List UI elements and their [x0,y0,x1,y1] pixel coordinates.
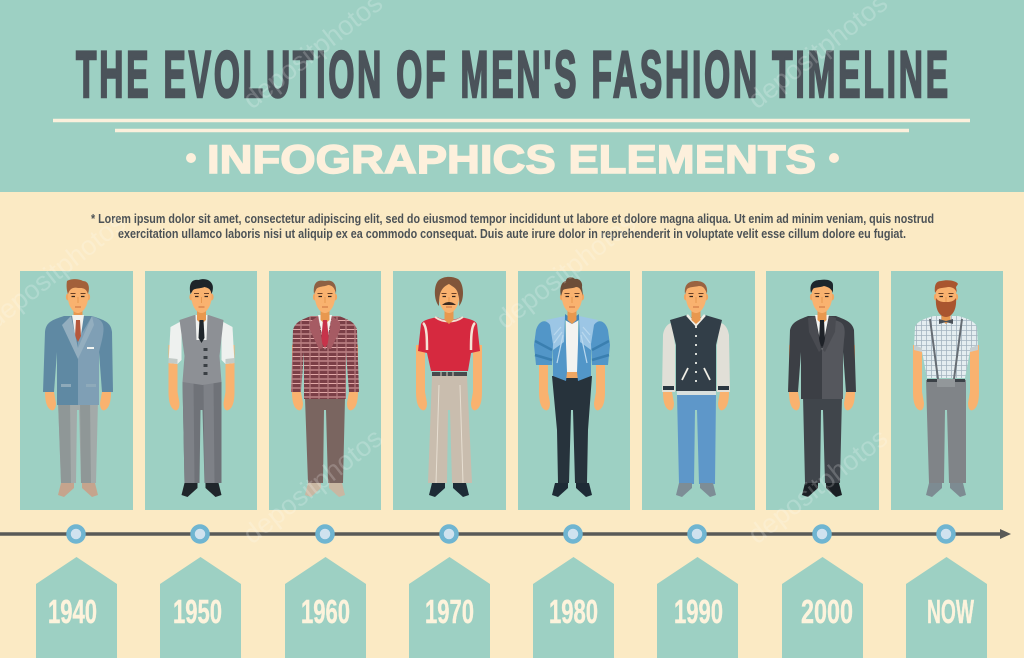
figure: 1990s varsity jacket [662,281,730,497]
watermarks [0,0,893,550]
year tag: now [906,557,987,658]
figure: 1940s suit [43,279,113,497]
title rules [53,120,970,130]
watermarks: depositphotos [490,208,641,335]
year tag: 1970 [409,557,490,658]
arrow head [1000,529,1011,539]
year tag: 1950 [160,557,241,658]
panel: 2000 [766,271,879,510]
panel: 1960 [269,271,381,510]
timeline nodes [68,526,954,542]
figure: 1970s flares [416,277,482,497]
watermarks: depositphotos [237,423,388,550]
title: THE EVOLUTION OF MEN'S FASHION TIMELINE [76,39,948,112]
panel: 1980 [518,271,630,510]
year tag: 1980 [533,557,614,658]
year tag: 1970: 1970 [425,593,474,630]
panel: 1970 [393,271,506,510]
figure: modern hipster [913,280,979,497]
year tag: 2000: 2000 [801,593,853,630]
timeline axis [0,532,1002,536]
subtitle: INFOGRAPHICS ELEMENTS [207,138,816,182]
year tag: 1950: 1950 [173,593,222,630]
figure: 1960s plaid jacket [291,281,359,497]
panel: 1990 [642,271,755,510]
year tag: 1940: 1940 [48,593,97,630]
figure: 1950s waistcoat [168,279,234,497]
year tag: 1960: 1960 [301,593,350,630]
panel: 1940 [20,271,133,510]
year tag: 1980: 1980 [549,593,598,630]
panel: now [891,271,1003,510]
figure: 1980s bomber jacket [534,277,610,497]
year tag: now: NOW [927,593,974,630]
header band [0,0,1024,192]
figure: 2000s dark suit [788,280,856,497]
year tag: 1960 [285,557,366,658]
intro text [91,211,934,241]
timeline [0,526,1011,542]
year tag: 1990 [657,557,738,658]
year tag: 1990: 1990 [674,593,723,630]
panel: 1950 [145,271,257,510]
watermarks: depositphotos [742,423,893,550]
year tag: 2000 [782,557,863,658]
year tag: 1940 [36,557,117,658]
